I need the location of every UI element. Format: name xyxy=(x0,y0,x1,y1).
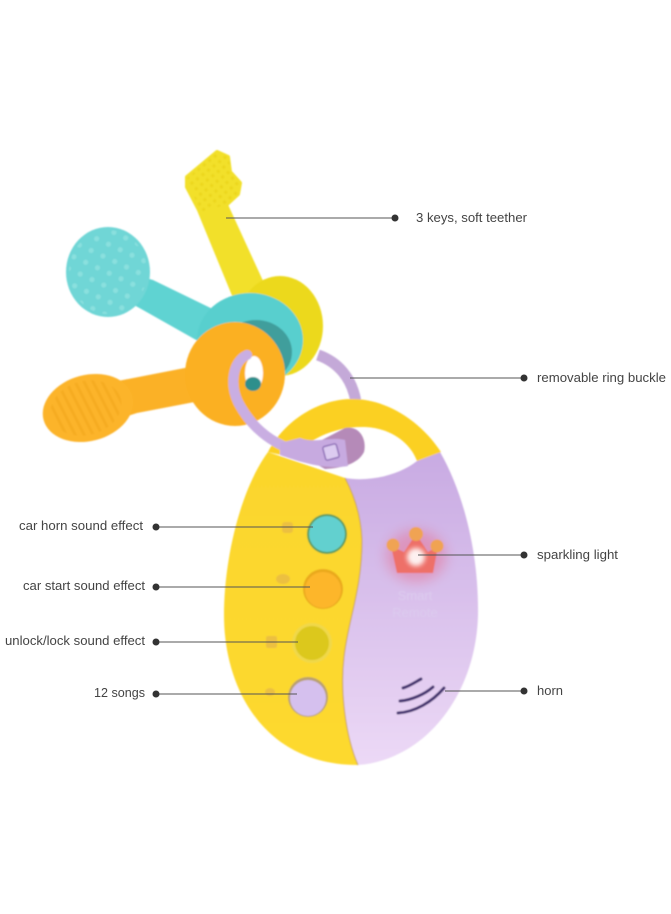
remote handle loop xyxy=(268,399,441,461)
orange key xyxy=(35,322,285,452)
callout: 3 keys xyxy=(226,211,527,225)
callout: car horn sound xyxy=(19,519,313,533)
callout: unlock/lock sound: unlock/lock sound effect xyxy=(5,634,146,648)
ring buckle: back arc xyxy=(318,355,356,402)
button: yellow unlock xyxy=(292,623,332,663)
callout: car horn sound: car horn sound effect xyxy=(19,519,144,533)
callout: sparkling light xyxy=(418,548,619,562)
faint logo text: Smart xyxy=(398,588,433,603)
button icons xyxy=(265,522,293,696)
callout: horn xyxy=(445,684,563,698)
ring clasp xyxy=(280,428,365,469)
callout: unlock/lock sound xyxy=(5,634,298,648)
callout: sparkling light: sparkling light xyxy=(537,548,619,562)
teal key xyxy=(66,227,303,387)
faint logo text xyxy=(392,588,438,620)
teal key ring xyxy=(197,293,303,387)
orange key ring xyxy=(185,322,285,426)
button: teal car horn xyxy=(307,514,347,554)
callout: 12 songs: 12 songs xyxy=(94,686,145,700)
callout: 12 songs xyxy=(94,686,297,700)
toy car key illustration xyxy=(35,152,478,765)
callout: ring buckle xyxy=(350,371,666,385)
button: orange car start xyxy=(303,569,343,609)
remote body xyxy=(224,452,478,765)
speaker horn icon xyxy=(398,679,444,713)
ring buckle: front arc xyxy=(233,355,288,448)
callout: 3 keys: 3 keys, soft teether xyxy=(416,211,527,225)
callout: car start sound: car start sound effect xyxy=(23,579,146,593)
callout: horn: horn xyxy=(537,684,563,698)
yellow key xyxy=(187,152,323,376)
yellow key ring xyxy=(237,276,323,376)
crown sparkling light xyxy=(386,527,446,582)
faint logo text: Remote xyxy=(392,605,438,620)
callout: car start sound xyxy=(23,579,310,593)
callout: ring buckle: removable ring buckle xyxy=(537,371,666,385)
button: purple songs xyxy=(288,677,328,717)
